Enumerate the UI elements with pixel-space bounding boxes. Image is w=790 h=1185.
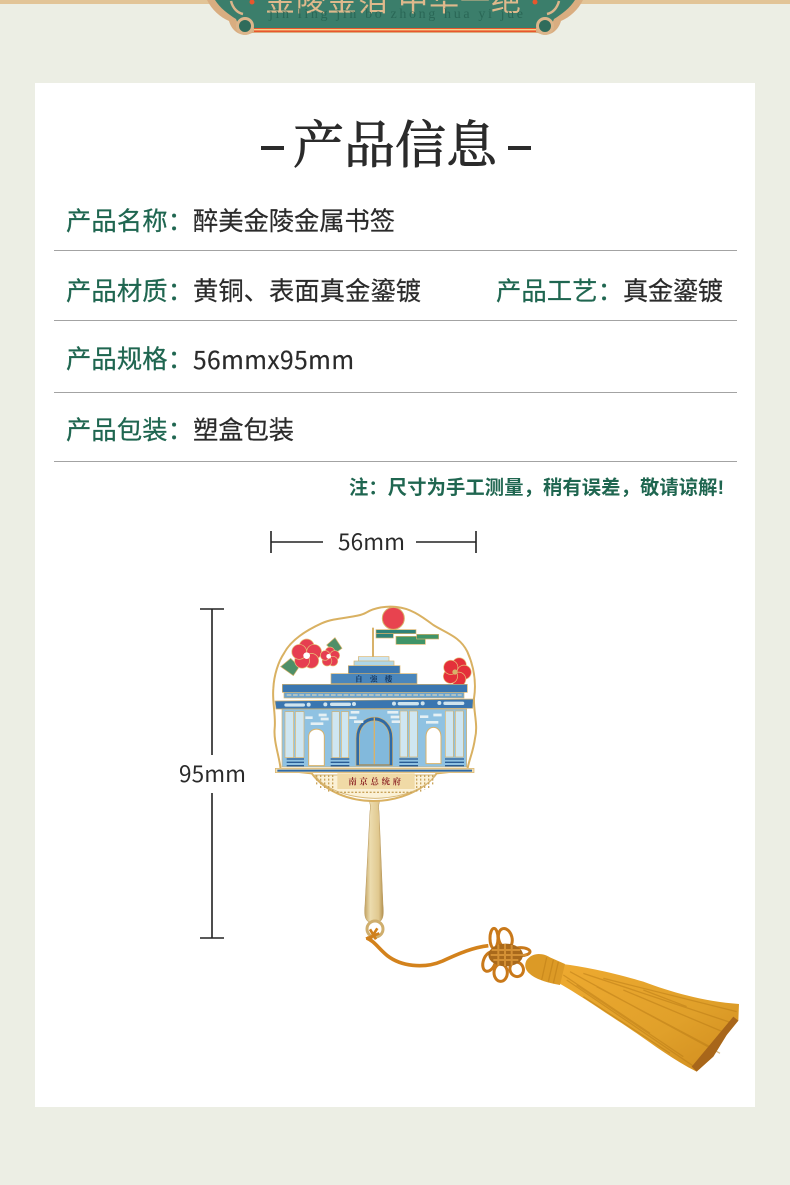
- title: 产品信息: [293, 104, 498, 178]
- flower right: [439, 653, 475, 689]
- dimension: width 56mm: 56mm: [338, 525, 405, 557]
- flag cloud: [376, 630, 439, 644]
- central arch: [356, 717, 393, 766]
- side windows: [309, 729, 324, 766]
- panel: product info: [35, 83, 755, 1107]
- wall: [282, 709, 467, 767]
- row: packaging: [66, 417, 294, 445]
- column bases: [287, 759, 464, 766]
- dimension: width 56mm: [271, 525, 476, 557]
- row: size: [66, 342, 354, 377]
- top banner: [0, 0, 790, 35]
- row: product name: 产品名称：: [66, 208, 193, 236]
- building: 自強樓: [355, 674, 394, 685]
- flowers left: [281, 638, 342, 676]
- tassel body: [559, 964, 739, 1072]
- row: packaging: 塑盒包装: [193, 417, 294, 445]
- row: size: 56mmx95mm: [193, 342, 354, 377]
- dimension: height 95mm: [179, 609, 246, 938]
- building: [275, 657, 474, 773]
- columns: [285, 711, 463, 758]
- row: packaging: 产品包装：: [66, 417, 193, 445]
- tassel cap: [525, 954, 565, 985]
- row: size: 产品规格：: [66, 346, 193, 374]
- flag pole: [372, 628, 374, 658]
- row: material and craft: 产品工艺：: [496, 278, 623, 306]
- base line: [275, 768, 474, 773]
- sun: [382, 607, 404, 629]
- knot: [480, 927, 530, 981]
- row: material and craft: [66, 278, 723, 306]
- brick ornaments: [305, 712, 442, 724]
- bookmark: [273, 607, 739, 1072]
- bottom plaque: 南京总统府: [348, 775, 402, 787]
- cord: [367, 938, 488, 966]
- cornice ornaments: [286, 703, 463, 705]
- top banner: jin ling jin bo zhong hua yi jue: [268, 7, 523, 22]
- note: 注：尺寸为手工测量，稍有误差，敬请谅解!: [349, 476, 724, 499]
- row: material and craft: 产品材质：: [66, 278, 193, 306]
- dimension: height 95mm: 95mm: [179, 757, 246, 789]
- tassel and knot, coordinates in 3x crop space: [366, 927, 739, 1072]
- handle: [365, 797, 383, 922]
- row: product name: 醉美金陵金属书签: [193, 208, 395, 236]
- ring: [367, 921, 383, 937]
- bottom plaque: [315, 773, 435, 798]
- row: material and craft: 黄铜、表面真金鎏镀: [193, 278, 421, 306]
- row: product name: [66, 208, 395, 236]
- roof tiers: [358, 657, 389, 661]
- row: material and craft: 真金鎏镀: [623, 278, 723, 306]
- fan and building, coordinates in 3x crop space: [273, 607, 476, 801]
- fan outline: [273, 607, 476, 801]
